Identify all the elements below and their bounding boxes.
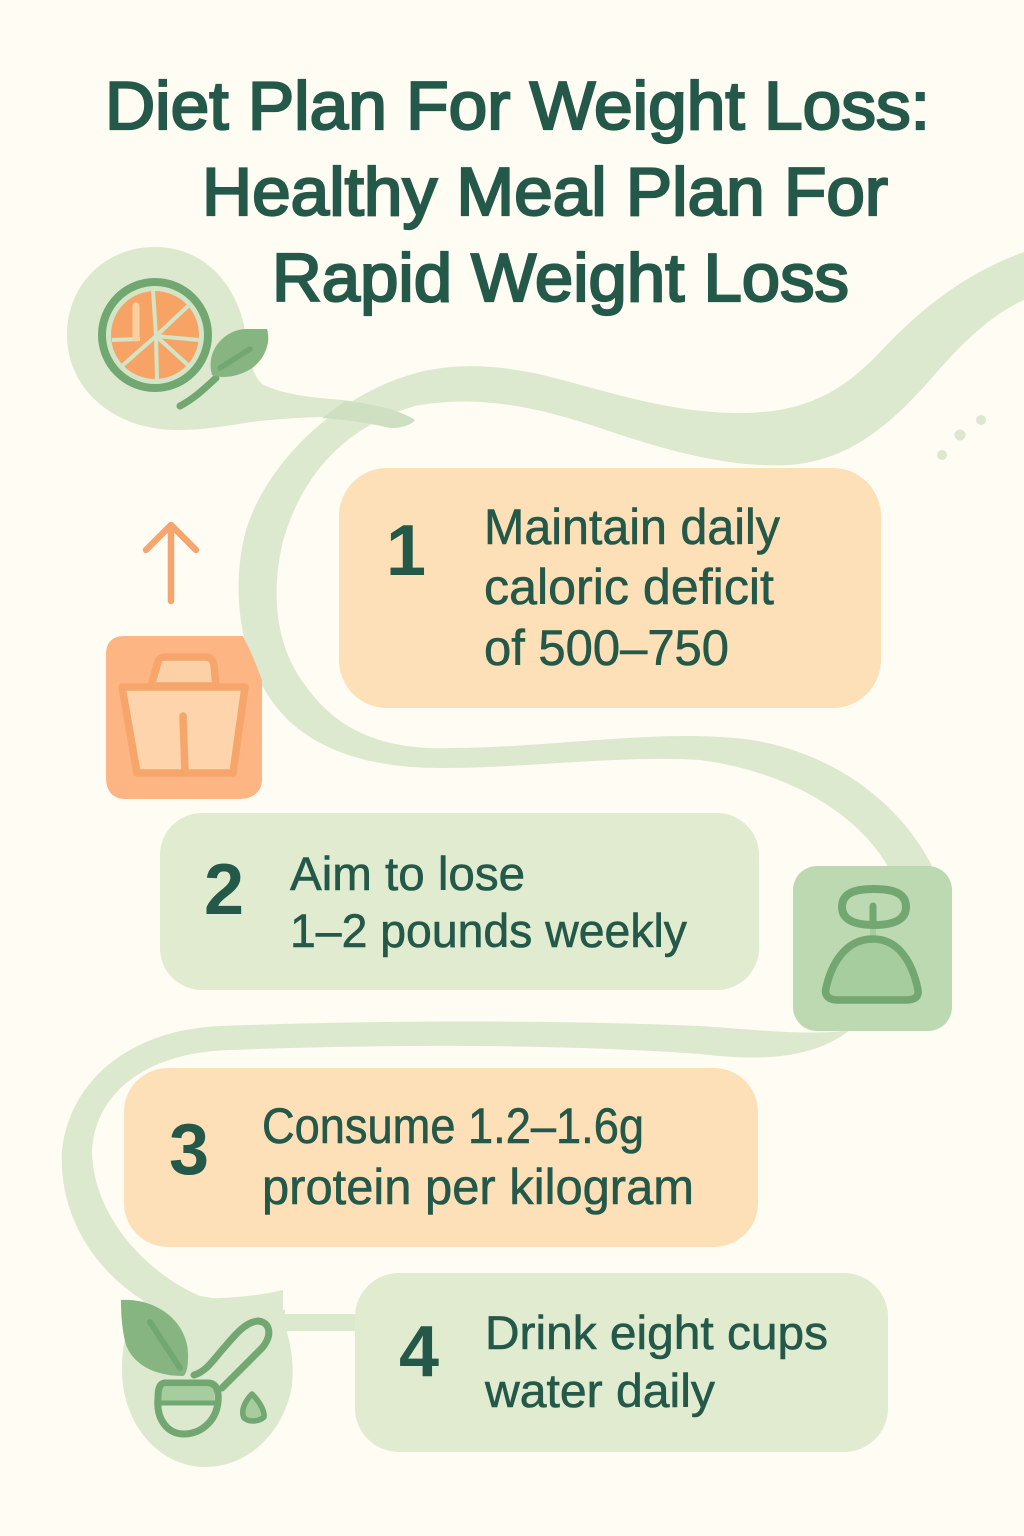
icon: green kitchen scale [793,866,952,1031]
step 3 text: protein per kilogram [262,1159,694,1215]
panel: step 3 [124,1068,758,1247]
title: Rapid Weight Loss [272,240,849,316]
step 4 text [484,1306,828,1417]
step 2 text: Aim to lose [290,847,525,900]
fruit blob with tail [67,247,415,430]
ribbon overlap [322,401,415,428]
icon: orange kettlebell scale [106,636,262,799]
title: Healthy Meal Plan For [202,154,888,230]
water and scoop blob [122,1290,293,1467]
step 2 text [290,847,687,957]
step 1 text: of 500–750 [484,620,729,676]
winding path: lower ribbon [62,1022,850,1330]
decorative dots [937,415,986,460]
icon: citrus fruit with leaf [102,282,268,406]
winding path: upper ribbon [239,252,1024,870]
step 1 text: caloric deficit [484,559,774,615]
connector to step 4 [280,1314,370,1331]
step 3 text [262,1098,694,1215]
step number 2: 2 [204,850,244,930]
title: Diet Plan For Weight Loss: [105,68,930,144]
step number 3: 3 [169,1110,209,1190]
step 4 text: Drink eight cups [485,1306,828,1359]
step 4 text: water daily [484,1364,716,1417]
title [105,68,930,316]
icon: leaf, scoop and water drop [121,1300,269,1434]
step number 1: 1 [386,511,426,591]
panel: step 1 [339,468,881,708]
panel: step 4 [355,1273,888,1452]
step 1 text [484,499,780,676]
step 3 text: Consume 1.2–1.6g [262,1098,644,1154]
step number 4: 4 [399,1312,439,1392]
panel: step 2 [160,813,759,990]
step 2 text: 1–2 pounds weekly [290,904,687,957]
icon: up arrow [146,525,196,601]
step 1 text: Maintain daily [484,499,780,555]
